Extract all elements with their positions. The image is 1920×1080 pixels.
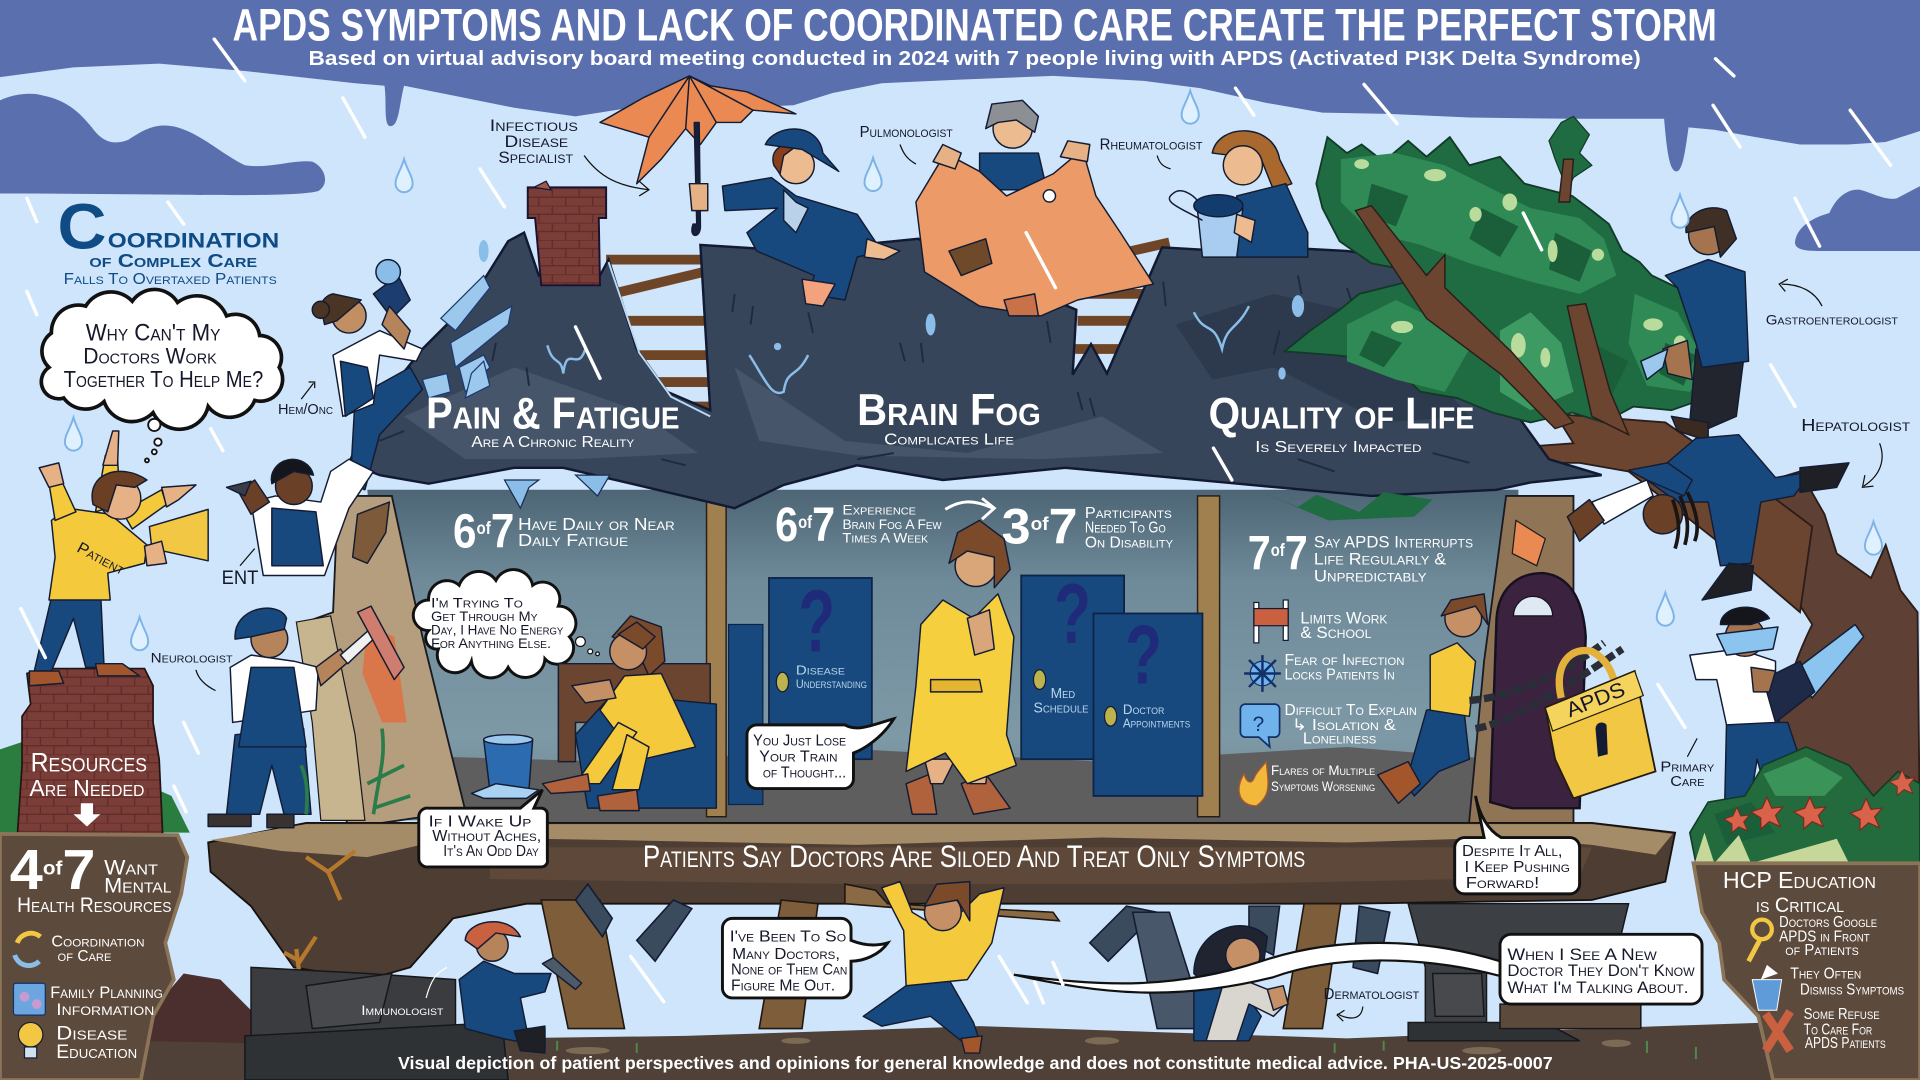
resource: disease education: Education xyxy=(56,1042,137,1063)
blue tape strips xyxy=(422,276,512,398)
room 3 stat: Life Regularly & xyxy=(1314,549,1446,568)
dismiss symptoms text: They Often xyxy=(1790,965,1861,982)
shingle ticks xyxy=(380,276,1469,471)
quote: been to so many doctors xyxy=(722,918,888,998)
thought cloud: why can't my doctors: Why Can't My xyxy=(86,319,220,346)
character: ENT specialist xyxy=(227,459,389,576)
stat: 4 of 7 mental health: of xyxy=(43,857,63,879)
beam text: Patients Say Doctors Are Siloed And Treat Only Symptoms xyxy=(643,838,1305,874)
label: infectious disease specialist: Infectious xyxy=(490,116,578,135)
broken pipes under beam xyxy=(576,884,1390,1029)
tan surface xyxy=(211,824,1673,857)
room 2 stat: 6 of 7: of xyxy=(798,512,812,532)
hepatologist dreadlocks xyxy=(1673,492,1697,549)
hcp education heading: HCP Education xyxy=(1723,867,1876,893)
resource: coordination of care: of Care xyxy=(58,948,111,965)
icon: light bulb xyxy=(18,1022,43,1058)
character: neurologist xyxy=(208,606,404,828)
door: med schedule: Med xyxy=(1051,686,1075,702)
room 1 thought cloud xyxy=(413,570,599,678)
door: disease understanding: Disease xyxy=(796,663,845,678)
room 1 thought cloud: Get Through My xyxy=(431,608,538,624)
label: ENT xyxy=(222,549,258,589)
character: dermatologist xyxy=(1194,926,1288,1041)
rain drops xyxy=(131,91,1882,650)
quote: if I wake up xyxy=(419,790,547,867)
padlock xyxy=(1559,651,1616,698)
room 2 stat: 3 of 7: 3 xyxy=(1002,499,1030,555)
right rocks xyxy=(1408,904,1641,1041)
room 2 stat: 6 of 7: Experience xyxy=(842,501,916,517)
roof heading: pain and fatigue: Are A Chronic Reality xyxy=(471,434,635,451)
room 3 stat: of xyxy=(1271,540,1285,560)
quote: new doctor with ribbon tail xyxy=(1014,934,1702,1004)
stat: 4 of 7 mental health xyxy=(10,838,171,917)
room 1 stat: 7 xyxy=(491,505,514,558)
label: neurologist xyxy=(151,649,233,691)
refuse care text: Some Refuse xyxy=(1804,1006,1880,1023)
left storm cloud xyxy=(0,94,325,195)
label: ENT: ENT xyxy=(222,567,258,589)
vine plants xyxy=(301,729,410,814)
label: primary care: Primary xyxy=(1660,759,1715,775)
chains xyxy=(1469,643,1622,729)
difficult to explain text: ↳ Isolation & xyxy=(1292,717,1396,734)
roof leaks xyxy=(547,306,1249,393)
label: immunologist xyxy=(361,967,447,1018)
quote: been to so many doctors: None of Them Can xyxy=(731,962,847,979)
label: rheumatologist xyxy=(1100,136,1203,169)
brush on wall xyxy=(1512,520,1545,566)
resource: coordination of care xyxy=(51,934,145,965)
left resources chimney xyxy=(17,669,163,839)
icon: virus xyxy=(1244,655,1281,692)
icon: flame xyxy=(1239,762,1268,806)
character: pulmonologist with tarp xyxy=(916,100,1153,316)
stat: 4 of 7 mental health: 7 xyxy=(62,838,96,901)
door: disease understanding xyxy=(769,571,872,759)
label: rheumatologist: Rheumatologist xyxy=(1100,136,1203,153)
flares text xyxy=(1271,763,1375,794)
refuse care text xyxy=(1804,1006,1886,1052)
room 3 stat: 7 xyxy=(1285,527,1308,580)
room 2 stat: 3 of 7 xyxy=(1002,499,1174,555)
label: dermatologist xyxy=(1324,986,1419,1021)
roof heading: brain fog: Complicates Life xyxy=(884,431,1014,448)
leaf highlights xyxy=(1354,159,1686,367)
drop near patient xyxy=(65,418,82,451)
right bush xyxy=(1690,747,1920,863)
right storm cloud xyxy=(1795,186,1920,251)
stat: 4 of 7 mental health: Health Resources xyxy=(17,894,171,917)
sprig xyxy=(1549,116,1592,190)
lower branch xyxy=(1506,414,1812,612)
character: patient pushing door xyxy=(1378,594,1488,803)
label: gastroenterologist: Gastroenterologist xyxy=(1766,311,1898,327)
icicles xyxy=(504,475,610,508)
fear of infection text: Locks Patients In xyxy=(1284,667,1395,684)
door: med schedule: Schedule xyxy=(1033,701,1089,717)
patient shirt label: Patient xyxy=(74,540,128,579)
coordination heading xyxy=(58,192,279,288)
room 2 stat: 3 of 7: of xyxy=(1031,513,1049,534)
roots xyxy=(284,851,355,980)
quote: new doctor with ribbon tail: When I See A New xyxy=(1507,945,1657,964)
right bark wall xyxy=(1468,496,1573,833)
character: hepatologist xyxy=(1567,435,1849,600)
label: pulmonologist: Pulmonologist xyxy=(860,124,953,141)
roof shading xyxy=(404,367,698,459)
subtitle: Based on virtual advisory board meeting conducted in 2024 with 7 people living with APDS (Activated PI3K Delta Syndrome) xyxy=(309,48,1641,70)
chimney xyxy=(528,181,606,285)
grass tips xyxy=(1695,833,1849,863)
roof valley highlight xyxy=(609,262,710,416)
door: med schedule xyxy=(1021,566,1124,759)
thought dots xyxy=(576,637,599,656)
flares text: Symptoms Worsening xyxy=(1271,779,1375,794)
limits work text: & School xyxy=(1300,623,1372,642)
character: immunologist xyxy=(459,922,582,1053)
icon: family planning xyxy=(13,983,45,1015)
room 3 stat: Say APDS Interrupts xyxy=(1314,532,1473,551)
tree foliage xyxy=(1284,116,1719,435)
room 2 stat: 3 of 7: On Disability xyxy=(1085,534,1174,551)
rafters in roof gaps xyxy=(606,242,1169,407)
doctors google text xyxy=(1779,914,1877,959)
quote: been to so many doctors: Many Doctors, xyxy=(732,946,840,963)
resource: coordination of care: Coordination xyxy=(51,934,145,951)
label: hem/onc xyxy=(278,382,333,418)
storm cloud banner xyxy=(0,0,1920,171)
quote: despite it all: Despite It All, xyxy=(1462,843,1562,860)
coordination heading: oordination xyxy=(108,221,279,254)
room 2 stat: 3 of 7: Needed To Go xyxy=(1085,520,1166,537)
limits work text: Limits Work xyxy=(1300,608,1387,627)
icon: speech question xyxy=(1240,704,1280,747)
door: disease understanding: ? xyxy=(798,571,835,670)
upper branches xyxy=(1356,159,1629,435)
door: med schedule: ? xyxy=(1054,566,1091,662)
small back door xyxy=(729,624,763,804)
door: doctor appointments xyxy=(1093,608,1202,796)
chimney broken tip xyxy=(534,181,551,190)
icon: waste basket xyxy=(1752,965,1782,1010)
wall damage patch xyxy=(362,624,407,722)
character: sitting patient on bed xyxy=(542,616,716,811)
icon: barricade xyxy=(1254,600,1288,643)
trunk base xyxy=(1739,471,1920,845)
quote: been to so many doctors: Figure Me Out. xyxy=(731,978,835,995)
resource: family planning information: Information xyxy=(56,1000,154,1019)
left ground patch xyxy=(122,1041,257,1080)
tree trunk behind roof xyxy=(1506,414,1920,845)
door: doctor appointments: ? xyxy=(1125,608,1162,701)
quote: new doctor with ribbon tail: What I'm Talking About. xyxy=(1507,978,1689,997)
roof heading: quality of life xyxy=(1209,390,1474,456)
footer disclaimer: Visual depiction of patient perspectives and opinions for general knowledge and does not constitute medical advice. PHA-US-2025-0007 xyxy=(398,1053,1553,1073)
room posts xyxy=(707,496,1220,817)
quote: new doctor with ribbon tail: Doctor They Don't Know xyxy=(1507,961,1695,980)
quote: you just lose: Your Train xyxy=(759,749,838,766)
water bucket xyxy=(471,735,539,798)
ground xyxy=(496,1022,1800,1080)
refuse care text: To Care For xyxy=(1804,1022,1872,1039)
resource: family planning information: Family Planning xyxy=(50,983,163,1002)
left greenery xyxy=(0,742,190,839)
fear of infection text xyxy=(1284,652,1405,684)
label: neurologist: Neurologist xyxy=(151,649,233,665)
room 2 stat: 6 of 7: 6 xyxy=(775,499,802,552)
room 1 stat: 6 xyxy=(453,505,480,558)
beam mid band xyxy=(490,847,1592,884)
quote: you just lose: You Just Lose xyxy=(753,733,846,750)
room 1 stat xyxy=(453,505,675,558)
character: patient in yellow robe xyxy=(906,520,1016,814)
thought dots xyxy=(145,419,162,462)
down arrow xyxy=(73,803,100,827)
platform beam xyxy=(208,823,1675,980)
room 2 stat: 3 of 7: 7 xyxy=(1049,499,1078,555)
doctors google text: APDS in Front xyxy=(1779,929,1870,946)
resource: family planning information xyxy=(50,983,163,1019)
label: dermatologist: Dermatologist xyxy=(1324,986,1419,1003)
thought cloud: why can't my doctors: Together To Help Me? xyxy=(64,366,263,392)
difficult to explain text: Difficult To Explain xyxy=(1284,702,1417,719)
left cliff panel xyxy=(0,834,187,1080)
room 3 stat: Unpredictably xyxy=(1314,567,1427,586)
left bark wall xyxy=(299,496,465,828)
arrow between stats xyxy=(945,498,994,519)
room 1 stat: Daily Fatigue xyxy=(518,530,628,550)
coordination heading: of Complex Care xyxy=(89,250,258,271)
label: primary care xyxy=(1660,738,1715,790)
resources heading xyxy=(29,747,147,827)
label: immunologist: Immunologist xyxy=(361,1003,444,1018)
quote: if I wake up: It's An Odd Day xyxy=(443,843,539,860)
label: infectious disease specialist: Disease xyxy=(504,132,568,151)
character: rheumatologist with pot xyxy=(1169,131,1308,257)
coordination heading: Falls To Overtaxed Patients xyxy=(64,271,277,288)
thought cloud: why can't my doctors xyxy=(41,289,283,462)
character: primary care with chainsaw xyxy=(1690,607,1864,833)
room 1 thought cloud: Day, I Have No Energy xyxy=(431,621,564,637)
stat: 4 of 7 mental health: Want xyxy=(104,856,158,879)
icon: magnifier xyxy=(1749,920,1772,961)
character: infectious disease with umbrella xyxy=(600,76,900,306)
character: gastroenterologist xyxy=(1641,208,1749,441)
doctors google text: Doctors Google xyxy=(1779,914,1877,931)
room 2 stat: 6 of 7 xyxy=(775,499,942,552)
ground stones xyxy=(566,1037,1631,1054)
door: doctor appointments: Appointments xyxy=(1123,715,1190,730)
difficult to explain text xyxy=(1284,702,1417,747)
character: hem/onc specialist xyxy=(312,260,422,490)
character: patient on chimney xyxy=(29,431,208,686)
label: infectious disease specialist: Specialist xyxy=(498,148,574,167)
room 1 thought cloud: For Anything Else. xyxy=(431,635,551,651)
maroon hill xyxy=(147,973,251,1056)
room 1 stat: of xyxy=(477,518,491,538)
quote: despite it all: I Keep Pushing xyxy=(1464,859,1570,876)
grass specks xyxy=(557,1041,1696,1059)
quote: you just lose: of Thought... xyxy=(763,765,846,782)
character: patient holding up beam xyxy=(863,882,1004,1053)
resources heading: Are Needed xyxy=(29,775,144,801)
room 3 stat: 7 xyxy=(1248,527,1274,580)
coordination heading: C xyxy=(58,192,107,263)
label: infectious disease specialist xyxy=(490,116,649,196)
room 3 stat xyxy=(1248,527,1473,586)
hcp education heading xyxy=(1723,867,1876,917)
thought cloud: why can't my doctors: Doctors Work xyxy=(83,344,217,369)
label: hepatologist xyxy=(1801,415,1911,487)
roof heading: quality of life: Is Severely Impacted xyxy=(1255,439,1422,456)
refuse care text: APDS Patients xyxy=(1805,1035,1886,1052)
flares text: Flares of Multiple xyxy=(1271,763,1375,778)
room 2 stat: 6 of 7: Times A Week xyxy=(842,529,928,545)
icon: red x xyxy=(1766,1011,1790,1051)
quote: if I wake up: Without Aches, xyxy=(432,828,541,845)
fear of infection text: Fear of Infection xyxy=(1284,652,1405,669)
left rocks xyxy=(245,967,508,1080)
icon: speech question: ? xyxy=(1253,713,1264,736)
flowers xyxy=(1724,770,1915,833)
dismiss symptoms text xyxy=(1790,965,1904,998)
door: disease understanding: Understanding xyxy=(796,677,867,691)
chained purple door with padlock xyxy=(1469,573,1656,808)
limits work text xyxy=(1300,608,1387,642)
stat: 4 of 7 mental health: Mental xyxy=(104,875,171,898)
door: doctor appointments: Doctor xyxy=(1123,702,1165,717)
roof tree overhang leaves xyxy=(1261,492,1433,520)
resource: disease education xyxy=(56,1024,137,1063)
label: hem/onc: Hem/Onc xyxy=(278,402,333,418)
doctors google text: of Patients xyxy=(1785,942,1859,959)
quote: despite it all xyxy=(1455,796,1580,894)
resource: disease education: Disease xyxy=(56,1024,128,1045)
room 2 stat: 6 of 7: Brain Fog A Few xyxy=(842,516,942,532)
dismiss symptoms text: Dismiss Symptoms xyxy=(1800,981,1904,998)
quote: been to so many doctors: I've Been To So xyxy=(730,929,847,946)
chained purple door with padlock: APDS xyxy=(1563,678,1628,722)
icon: coordination arrows xyxy=(15,933,40,966)
broken wall plank xyxy=(296,616,365,820)
label: pulmonologist xyxy=(860,124,953,164)
quote: you just lose xyxy=(747,719,894,789)
blue roof puddles xyxy=(479,240,1304,380)
roof xyxy=(349,233,1602,508)
hcp education heading: is Critical xyxy=(1756,894,1844,917)
darker leaf clumps xyxy=(1359,184,1696,398)
mid greens xyxy=(1341,153,1616,294)
right cliff panel xyxy=(1693,863,1920,1080)
resources heading: Resources xyxy=(31,747,147,777)
label: hepatologist: Hepatologist xyxy=(1801,415,1911,435)
room 1 thought cloud: I'm Trying To xyxy=(431,594,523,610)
roof heading: brain fog: Brain Fog xyxy=(857,386,1041,435)
difficult to explain text: Loneliness xyxy=(1303,730,1376,747)
support posts xyxy=(541,884,1341,1029)
room 1 stat: Have Daily or Near xyxy=(518,514,675,534)
label: primary care: Care xyxy=(1670,774,1705,790)
roof heading: quality of life: Quality of Life xyxy=(1209,390,1474,439)
dark canopy xyxy=(1284,137,1719,422)
stat: 4 of 7 mental health: 4 xyxy=(10,838,41,901)
house interior rooms xyxy=(367,490,1518,820)
label: gastroenterologist xyxy=(1766,279,1898,327)
room 2 stat: 3 of 7: Participants xyxy=(1085,505,1172,522)
roof heading: pain and fatigue: Pain & Fatigue xyxy=(426,390,680,439)
quote: despite it all: Forward! xyxy=(1466,875,1539,892)
quote: if I wake up: If I Wake Up xyxy=(429,814,531,831)
room 2 stat: 6 of 7: 7 xyxy=(812,499,835,552)
floor xyxy=(441,747,1494,823)
